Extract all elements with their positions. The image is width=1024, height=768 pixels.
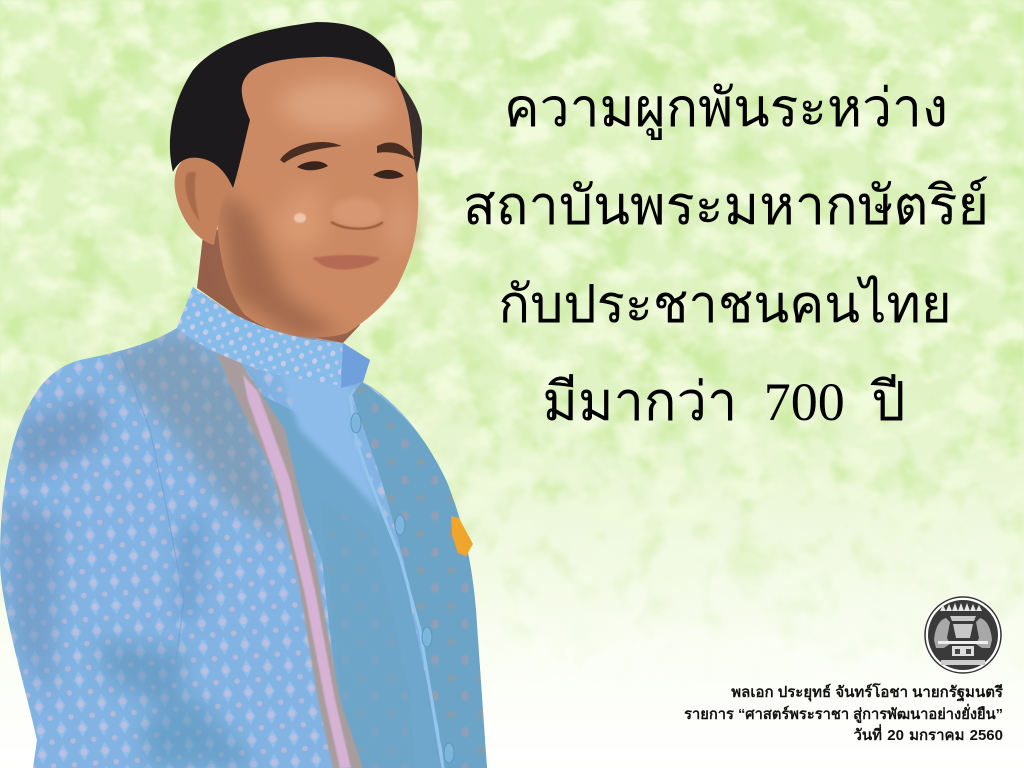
ear bbox=[175, 150, 240, 245]
cheek highlight bbox=[294, 213, 306, 223]
caption: speaker, programme and date: พลเอก ประยุทธ์ จันทร์โอชา นายกรัฐมนตรี bbox=[731, 682, 1004, 702]
eyebrows bbox=[280, 142, 342, 163]
buttons bbox=[351, 413, 454, 763]
zip line bbox=[350, 395, 443, 768]
badge bbox=[451, 516, 473, 556]
jacket bbox=[0, 287, 487, 768]
collar bbox=[177, 287, 343, 385]
title: กับประชาชนคนไทย bbox=[498, 275, 952, 334]
title: สถาบันพระมหากษัตริย์ bbox=[463, 176, 989, 236]
nose bbox=[332, 198, 382, 228]
caption: speaker, programme and date: วันที่ 20 มกราคม 2560 bbox=[854, 724, 1003, 744]
front panel: left of zip bbox=[262, 395, 445, 768]
title: ความผูกพันระหว่าง bbox=[504, 79, 948, 140]
shirt opening bbox=[285, 376, 380, 511]
eyes bbox=[297, 161, 328, 170]
jacket shading: shoulder and sleeve folds bbox=[4, 330, 285, 768]
woven vertical band bbox=[215, 350, 363, 768]
mouth bbox=[312, 255, 380, 269]
neck and face bbox=[170, 22, 422, 343]
title bbox=[463, 79, 989, 432]
icon: government seal bbox=[925, 597, 1001, 673]
caption: speaker, programme and date bbox=[684, 682, 1004, 744]
portrait figure (stylised) bbox=[0, 0, 500, 768]
title: มีมากว่า 700 ปี bbox=[542, 372, 906, 432]
hair bbox=[170, 22, 395, 188]
caption: speaker, programme and date: รายการ “ศาสตร์พระราชา สู่การพัฒนาอย่างยั่งยืน” bbox=[684, 703, 1003, 724]
front panel: right of zip bbox=[352, 382, 487, 768]
